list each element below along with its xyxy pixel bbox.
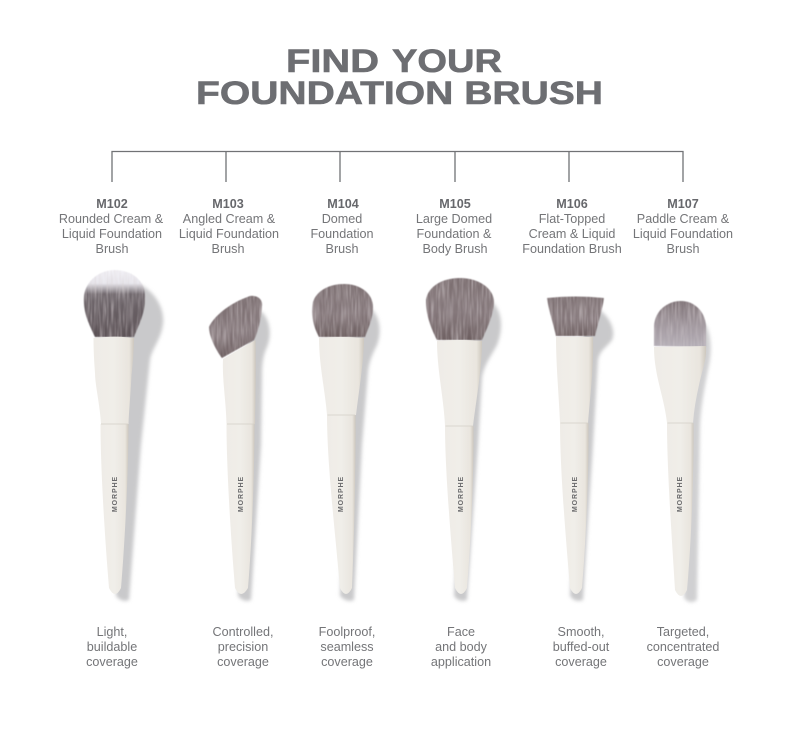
description: M102 bbox=[86, 625, 138, 669]
brand: MORPHE bbox=[458, 476, 465, 512]
shadow bbox=[454, 302, 501, 601]
description: M107: coverage bbox=[657, 655, 709, 669]
label: M107: Paddle Cream & bbox=[637, 212, 730, 226]
description: M102: coverage bbox=[86, 655, 138, 669]
seam bbox=[446, 425, 473, 427]
seam bbox=[101, 423, 128, 425]
brand: MORPHE bbox=[238, 476, 245, 512]
label: M103: Brush bbox=[212, 242, 244, 256]
handle bbox=[667, 423, 694, 596]
brand: MORPHE bbox=[338, 476, 345, 512]
brush: M105 bbox=[426, 278, 501, 601]
description: M105: application bbox=[431, 655, 491, 669]
description: M104 bbox=[319, 625, 375, 669]
handle bbox=[327, 415, 356, 594]
description: M107 bbox=[647, 625, 719, 669]
label: M104: Domed bbox=[322, 212, 362, 226]
label: M105: M105 bbox=[439, 197, 471, 211]
label: M107: M107 bbox=[667, 197, 699, 211]
label: M104: Foundation bbox=[310, 227, 374, 241]
brush: M106 bbox=[547, 296, 613, 601]
label: M102 bbox=[59, 197, 164, 256]
description: M104: seamless bbox=[320, 640, 374, 654]
label: M102: Brush bbox=[96, 242, 128, 256]
label: M105: Body Brush bbox=[422, 242, 488, 256]
title: FIND bbox=[286, 43, 379, 79]
shadow bbox=[116, 284, 163, 601]
description: M106 bbox=[553, 625, 610, 669]
description: M102: Light, bbox=[97, 625, 127, 639]
description: M107: Targeted, bbox=[657, 625, 709, 639]
seam bbox=[227, 423, 254, 425]
description: M107: concentrated bbox=[647, 640, 719, 654]
ferrule bbox=[94, 337, 134, 424]
shadow bbox=[570, 310, 613, 601]
ferrule bbox=[437, 340, 482, 426]
handle bbox=[560, 423, 589, 594]
label: M103: Liquid Foundation bbox=[179, 227, 279, 241]
title bbox=[196, 43, 603, 111]
label: M106: Flat-Topped bbox=[539, 212, 605, 226]
bristles bbox=[209, 296, 262, 358]
label: M106 bbox=[522, 197, 622, 256]
label: M104: M104 bbox=[327, 197, 359, 211]
label: M105 bbox=[416, 197, 492, 256]
shadow bbox=[238, 310, 270, 601]
description: M103: precision bbox=[218, 640, 268, 654]
label: M103: Angled Cream & bbox=[183, 212, 276, 226]
bristles bbox=[426, 278, 494, 340]
title: FOUNDATION BRUSH bbox=[196, 75, 603, 111]
label: M102: M102 bbox=[96, 197, 128, 211]
shadow bbox=[340, 308, 380, 601]
label: M106: Foundation Brush bbox=[522, 242, 622, 256]
seam bbox=[328, 414, 355, 416]
bristles bbox=[654, 301, 706, 347]
brush: M104 bbox=[312, 284, 380, 601]
bristles bbox=[84, 270, 145, 337]
description: M106: coverage bbox=[555, 655, 607, 669]
bristles bbox=[312, 284, 373, 337]
label: M103 bbox=[179, 197, 279, 256]
label: M107: Brush bbox=[667, 242, 699, 256]
brand: MORPHE bbox=[112, 476, 119, 512]
label: M106: Cream & Liquid bbox=[529, 227, 615, 241]
shadow bbox=[684, 320, 711, 602]
ferrule bbox=[319, 337, 364, 415]
label: M107: Liquid Foundation bbox=[633, 227, 733, 241]
handle bbox=[445, 426, 474, 594]
label: M102: Liquid Foundation bbox=[62, 227, 162, 241]
seam bbox=[560, 422, 588, 424]
connector tree bbox=[112, 152, 683, 182]
label: M102: Rounded Cream & bbox=[59, 212, 164, 226]
description: M105: and body bbox=[435, 640, 488, 654]
label: M104: Brush bbox=[326, 242, 358, 256]
description: M103: Controlled, bbox=[213, 625, 273, 639]
brand: MORPHE bbox=[572, 476, 579, 512]
label: M105: Foundation & bbox=[417, 227, 492, 241]
label: M107 bbox=[633, 197, 733, 256]
title: YOUR bbox=[392, 43, 502, 79]
description: M105 bbox=[431, 625, 491, 669]
brush: M107 bbox=[654, 301, 711, 602]
label: M104 bbox=[310, 197, 374, 256]
description: M105: Face bbox=[447, 625, 475, 639]
description: M102: buildable bbox=[87, 640, 137, 654]
brand: MORPHE bbox=[677, 476, 684, 512]
ferrule bbox=[556, 337, 593, 423]
description: M106: Smooth, bbox=[558, 625, 604, 639]
description: M103: coverage bbox=[217, 655, 269, 669]
seam bbox=[668, 422, 693, 424]
description: M104: coverage bbox=[321, 655, 373, 669]
description: M103 bbox=[213, 625, 273, 669]
ferrule bbox=[223, 340, 256, 424]
ferrule bbox=[654, 346, 706, 423]
brush: M102 bbox=[84, 270, 163, 601]
handle bbox=[100, 424, 128, 594]
description: M106: buffed-out bbox=[553, 640, 610, 654]
brush: M103 bbox=[209, 296, 270, 601]
label: M106: M106 bbox=[556, 197, 588, 211]
label: M105: Large Domed bbox=[416, 212, 492, 226]
label: M103: M103 bbox=[212, 197, 244, 211]
handle bbox=[226, 424, 254, 594]
description: M104: Foolproof, bbox=[319, 625, 375, 639]
bristles bbox=[547, 296, 604, 336]
